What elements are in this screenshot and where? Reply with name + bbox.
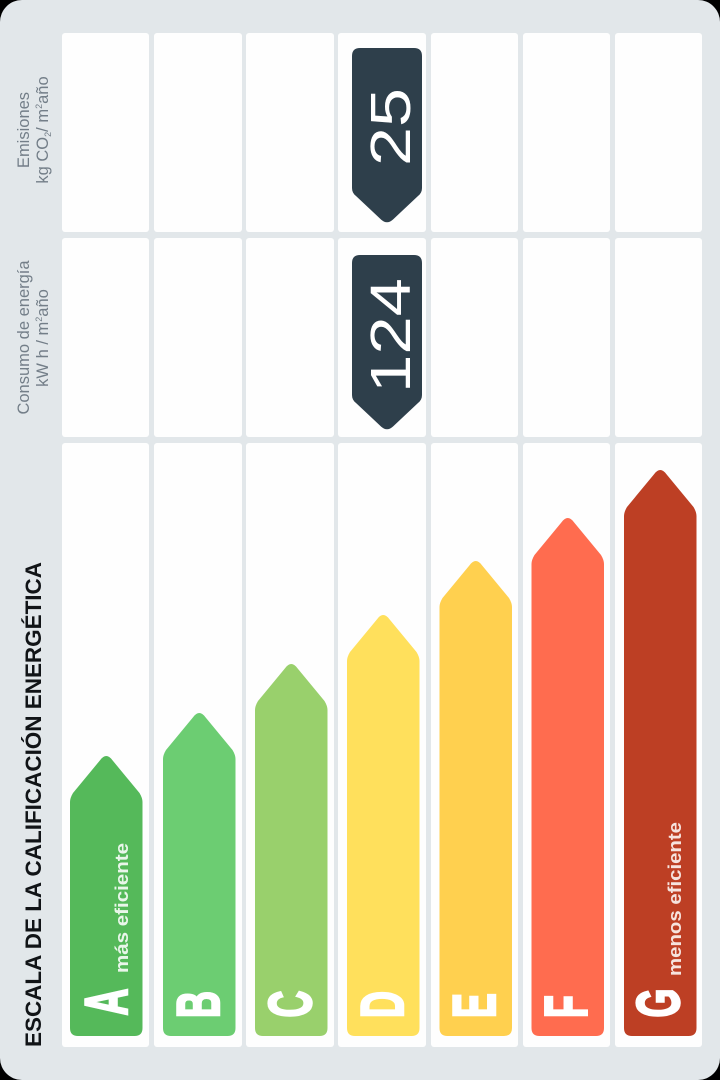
arrow: class C [255, 664, 328, 1036]
letter G: G [625, 989, 692, 1018]
heading: emissions: kg CO [34, 137, 52, 184]
label: least efficient: menos eficiente [664, 822, 685, 976]
arrow: class A [70, 756, 142, 1036]
heading: energy consumption: Consumo de energía [15, 260, 33, 415]
letter A: A [73, 989, 140, 1016]
title: ESCALA DE LA CALIFICACIÓN ENERGÉTICA [21, 562, 46, 1047]
heading: emissions: 2 [34, 104, 44, 109]
label: most efficient: más eficiente [111, 843, 132, 973]
arrow: class G [624, 470, 696, 1036]
heading: energy consumption: 2 [34, 317, 44, 322]
panel: energy consumption row cells [62, 238, 702, 437]
heading: emissions [15, 76, 53, 184]
arrow: class D [347, 615, 420, 1036]
heading: emissions: Emisiones [15, 92, 33, 168]
panel: rating scale row cells [62, 443, 702, 1047]
panel: emissions row cells [62, 33, 702, 232]
arrow: class B [163, 713, 236, 1036]
marker: energy consumption value [352, 255, 423, 429]
letter E: E [441, 993, 508, 1018]
letter F: F [533, 995, 600, 1018]
arrow: class E [440, 561, 512, 1036]
heading: emissions: 2 [43, 132, 53, 137]
marker: emissions value [352, 48, 423, 222]
value 25: 25 [359, 88, 423, 166]
letter D: D [349, 991, 416, 1018]
heading: emissions: / m [34, 109, 52, 132]
heading: energy consumption: kW h / m [34, 322, 52, 387]
letter C: C [257, 991, 324, 1018]
heading: energy consumption [15, 260, 52, 415]
arrow: class F [532, 518, 604, 1036]
value 124: 124 [359, 278, 423, 393]
heading: emissions: año [34, 76, 52, 104]
heading: energy consumption: año [34, 289, 52, 317]
letter B: B [165, 991, 232, 1018]
